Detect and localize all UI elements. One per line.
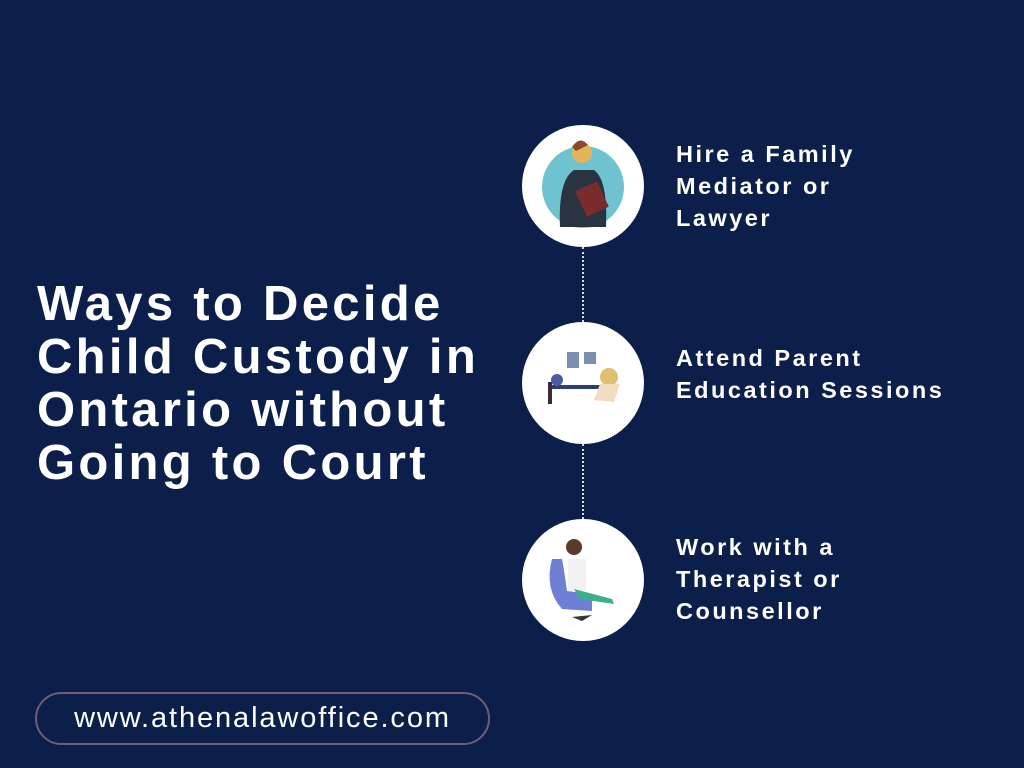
label 3: Therapist or bbox=[676, 566, 842, 592]
label 3: Work with a bbox=[676, 534, 835, 560]
title: Ways to Decide bbox=[37, 277, 444, 331]
label 3 bbox=[676, 534, 842, 624]
url pill bbox=[35, 692, 490, 745]
label 2: Attend Parent bbox=[676, 345, 863, 371]
label 2 bbox=[676, 345, 944, 403]
title bbox=[37, 277, 479, 490]
icon: therapist bbox=[522, 519, 644, 641]
url pill: www.athenalawoffice.com bbox=[74, 702, 451, 734]
label 3: Counsellor bbox=[676, 598, 824, 624]
label 1 bbox=[676, 141, 855, 231]
title: Ontario without bbox=[37, 383, 448, 437]
icon: lawyer bbox=[522, 125, 644, 247]
icon: parent education bbox=[522, 322, 644, 444]
title: Going to Court bbox=[37, 436, 429, 490]
label 1: Lawyer bbox=[676, 205, 772, 231]
label 2: Education Sessions bbox=[676, 377, 944, 403]
label 1: Mediator or bbox=[676, 173, 831, 199]
title: Child Custody in bbox=[37, 330, 479, 384]
label 1: Hire a Family bbox=[676, 141, 855, 167]
